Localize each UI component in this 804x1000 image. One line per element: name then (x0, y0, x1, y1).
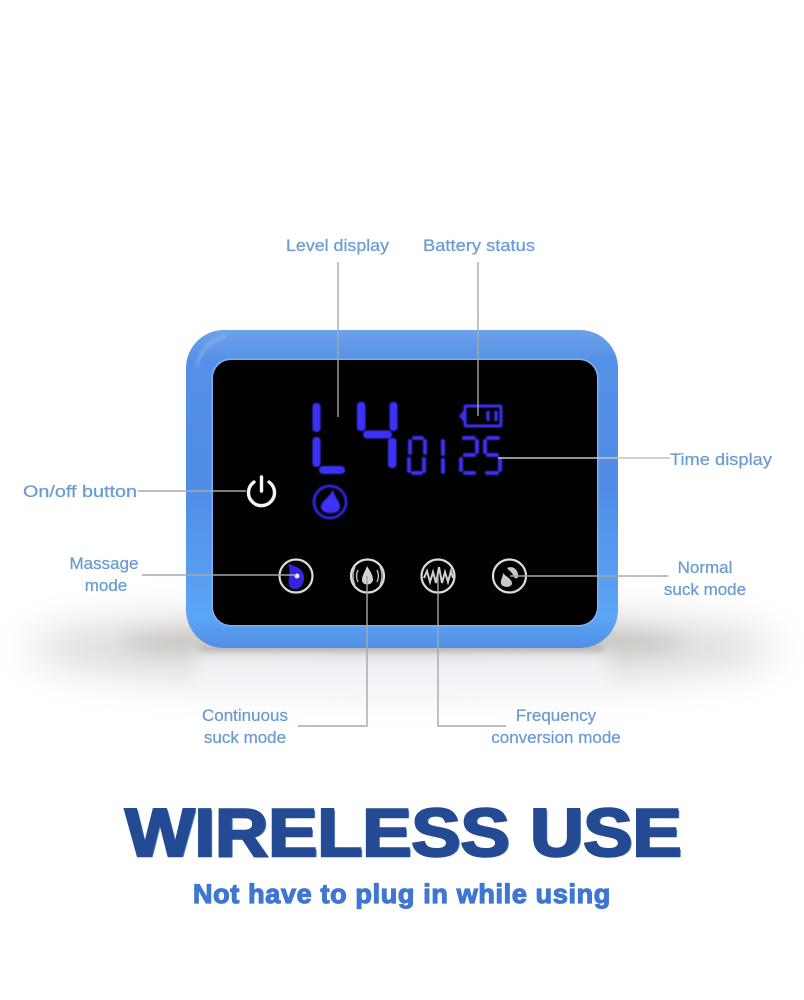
label: frequency conversion mode (491, 706, 621, 747)
label: normal suck mode: Normal (678, 558, 732, 577)
label: massage mode: Massage (70, 554, 138, 573)
label: level display: Level display (286, 236, 390, 255)
icon: continuous suck mode (351, 560, 384, 592)
label: continuous suck mode: Continuous (202, 706, 288, 725)
icon: on/off button (248, 477, 274, 506)
subtitle: Not have to plug in while using (193, 879, 611, 909)
label: frequency conversion mode: conversion mode (491, 728, 621, 747)
label: continuous suck mode: suck mode (204, 728, 286, 747)
label: continuous suck mode (202, 706, 288, 747)
label: time display: Time display (670, 450, 773, 469)
label: battery status: Battery status (423, 236, 535, 255)
icon: water drop level (314, 486, 346, 518)
icon: normal suck mode (493, 560, 526, 592)
label: normal suck mode (664, 558, 746, 599)
label: frequency conversion mode: Frequency (516, 706, 597, 725)
label: massage mode (70, 554, 138, 595)
icon: massage mode (280, 560, 312, 592)
device: control panel (186, 330, 618, 648)
label: massage mode: mode (85, 576, 127, 595)
battery icon (461, 406, 501, 426)
label: normal suck mode: suck mode (664, 580, 746, 599)
leader lines (138, 262, 670, 726)
title: WIRELESS USE (125, 795, 682, 871)
device casing (186, 330, 618, 648)
touch screen (213, 360, 597, 625)
time display: 01 25 (409, 438, 500, 473)
level display: L4 (312, 402, 398, 474)
icon: frequency conversion mode (422, 560, 454, 592)
device shadow (27, 612, 777, 696)
label: on/off button: On/off button (23, 482, 137, 501)
